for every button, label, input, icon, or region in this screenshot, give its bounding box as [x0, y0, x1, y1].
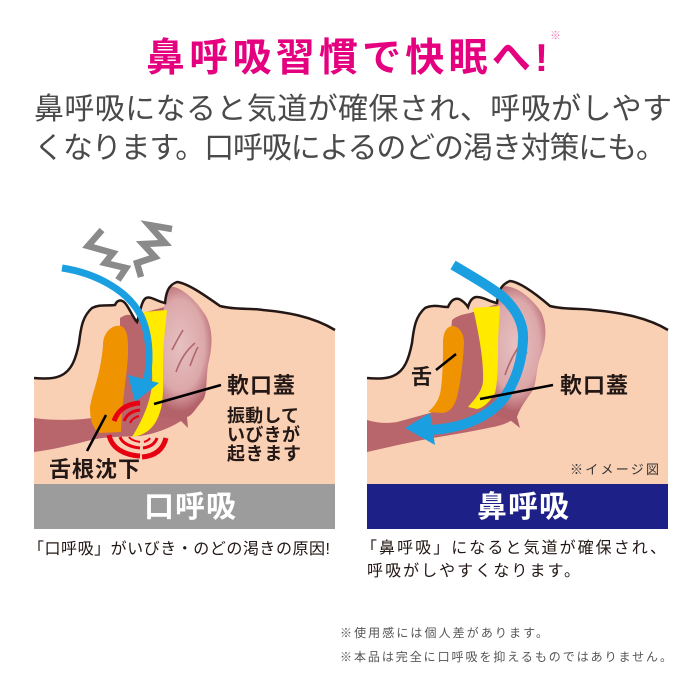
panel: nasal breathing heading bar: 鼻呼吸	[477, 491, 569, 524]
outline	[367, 281, 668, 379]
label: soft palate: 軟口蓋	[227, 373, 295, 398]
pharynx	[485, 286, 545, 428]
label: vibration note	[227, 406, 301, 464]
head silhouette	[367, 281, 668, 484]
outline	[34, 282, 335, 379]
title: ※	[550, 30, 561, 42]
airflow arrow	[418, 265, 523, 430]
throat tube	[367, 395, 517, 452]
panel: mouth breathing heading bar: 口呼吸	[144, 491, 236, 524]
label: tongue base: 舌根沈下	[49, 457, 140, 482]
panel: mouth breathing diagram	[34, 225, 335, 484]
pointer lines	[436, 354, 553, 399]
snore zigzag icons	[88, 225, 172, 280]
label: vibration note: 振動して	[227, 406, 299, 426]
footnotes	[340, 625, 672, 664]
label: tongue: 舌	[411, 366, 432, 389]
head silhouette	[34, 282, 335, 484]
panel: mouth breathing heading bar	[34, 484, 335, 529]
intro text: くなります。口呼吸によるのどの渇き対策にも。	[34, 132, 666, 165]
label: vibration note: いびきが	[227, 424, 300, 445]
mouth cavity	[120, 306, 172, 432]
mouth cavity	[430, 304, 500, 420]
pointer lines	[87, 385, 221, 451]
note: illustration: ※イメージ図	[570, 462, 659, 477]
pharynx	[150, 287, 212, 428]
soft palate	[468, 306, 500, 409]
footnotes: ※使用感には個人差があります。	[340, 625, 548, 640]
tongue	[90, 326, 128, 433]
title: 鼻呼吸習慣で快眠へ!	[146, 37, 548, 80]
footnotes: ※本品は完全に口呼吸を抑えるものではありません。	[340, 650, 672, 664]
caption: mouth breathing: 「口呼吸」がいびき・のどの渇きの原因!	[28, 540, 330, 558]
throat tube	[34, 400, 187, 452]
panel: nasal breathing diagram	[367, 265, 668, 484]
intro text	[34, 93, 672, 165]
panel: nasal breathing heading bar	[367, 484, 668, 529]
tongue	[428, 326, 464, 413]
caption: nasal breathing	[361, 539, 666, 580]
caption: nasal breathing: 「鼻呼吸」になると気道が確保され、	[361, 539, 666, 557]
red vibration arcs	[109, 403, 166, 457]
airflow arrow	[62, 268, 149, 385]
label: soft palate: 軟口蓋	[560, 373, 628, 398]
caption: nasal breathing: 呼吸がしやすくなります。	[367, 562, 580, 580]
intro text: 鼻呼吸になると気道が確保され、呼吸がしやす	[34, 93, 672, 126]
soft palate	[132, 310, 167, 437]
label: vibration note: 起きます	[227, 444, 301, 464]
